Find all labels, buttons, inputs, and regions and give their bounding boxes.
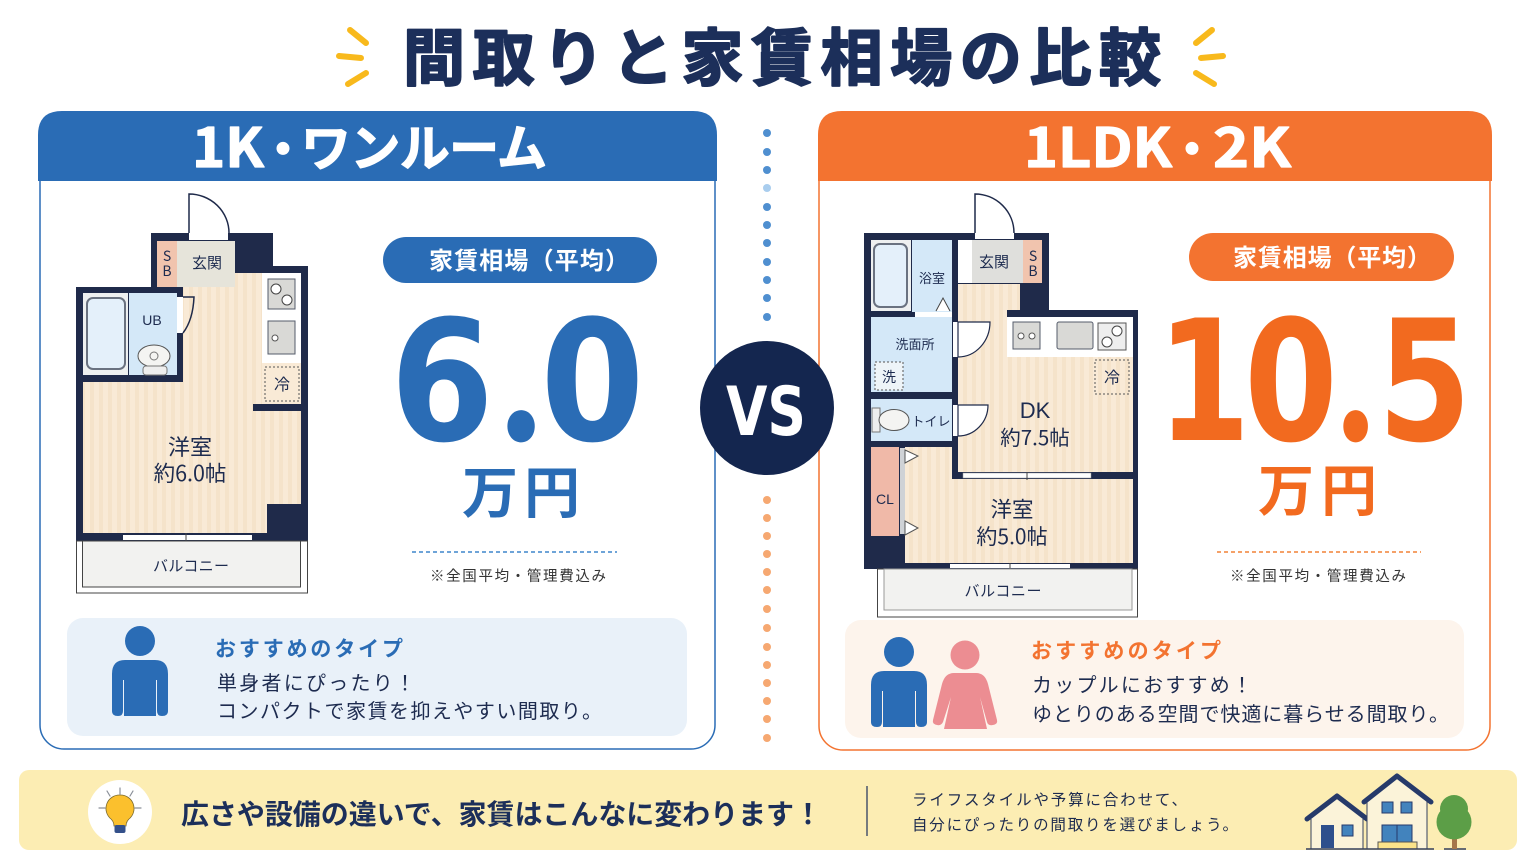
divider dots: blue: [763, 129, 771, 321]
floor: [83, 273, 301, 533]
closet: [871, 447, 918, 536]
floor plan: 1K: [76, 194, 308, 593]
entrance: 玄関: [979, 251, 1009, 272]
washroom: [871, 317, 952, 392]
rent label pill: 家賃相場（平均）: [429, 241, 629, 276]
price: 6.0: 0: [540, 284, 644, 480]
washroom: 洗面所: [895, 334, 935, 353]
icon: houses and tree: [1306, 776, 1472, 849]
icon: right sparkle: [1196, 30, 1223, 84]
bottom banner: [19, 770, 1517, 850]
room label: [154, 430, 226, 488]
panel header: 1LDK: 2K: [1213, 104, 1292, 183]
icon: light bulb: [88, 780, 152, 844]
room labels: DK: [1020, 398, 1051, 423]
recommendation text: カップルにおすすめ！: [1032, 669, 1252, 698]
kitchen: [1007, 310, 1138, 357]
DK floor: [958, 284, 1133, 472]
toilet: トイレ: [911, 411, 951, 430]
price: 10.5: .: [1334, 246, 1377, 489]
door swing: [975, 194, 1014, 233]
kitchen: [262, 273, 301, 363]
banner side text: [912, 788, 1238, 835]
panel header: 1LDK: ・: [1169, 114, 1215, 180]
panel header: 1LDK: [818, 104, 1492, 183]
room labels: 洋室: [990, 493, 1034, 524]
room labels: [976, 398, 1070, 551]
recommendation box: [845, 620, 1464, 738]
panel header: 1K: ・: [260, 114, 306, 180]
rent label pill: 家賃相場（平均）: [1233, 238, 1431, 273]
balcony: バルコニー: [964, 580, 1042, 601]
fridge: [262, 363, 301, 404]
recommendation text: コンパクトで家賃を抑えやすい間取り。: [217, 695, 602, 724]
recommendation text: おすすめのタイプ: [215, 633, 403, 663]
unit bath: UB: [142, 312, 162, 328]
balcony: [76, 533, 308, 593]
recommendation text: ゆとりのある空間で快適に暮らせる間取り。: [1032, 698, 1449, 727]
unit: 万円: [462, 449, 580, 530]
icon: couple: [871, 637, 997, 729]
rent label pill: [1189, 233, 1454, 281]
bedroom floor: [905, 447, 1133, 563]
price: 10.5: 5: [1378, 284, 1471, 480]
door swing: [189, 194, 229, 233]
washroom: 洗: [882, 367, 896, 387]
bathroom: [871, 240, 952, 317]
balcony: [878, 569, 1138, 617]
balcony: バルコニー: [153, 555, 229, 576]
panel header: 1LDK: 1LDK: [1024, 104, 1173, 183]
entrance: [958, 240, 1042, 283]
divider dots: orange: [763, 496, 771, 742]
price: 10.5: 0: [1244, 284, 1338, 480]
fridge: 冷: [1104, 364, 1120, 388]
title: 間取りと家賃相場の比較: [403, 8, 1161, 98]
VS badge: VS: [726, 373, 806, 452]
price: 10.5: 1: [1157, 284, 1251, 480]
closet: CL: [876, 491, 894, 507]
bathroom: 浴室: [919, 268, 945, 287]
panel: 1LDK 2K: [818, 104, 1492, 750]
recommendation text: [1031, 635, 1449, 727]
room label: 洋室: [168, 430, 212, 462]
entrance: 玄関: [192, 252, 222, 273]
interior doors: [953, 322, 990, 436]
entrance: B: [1028, 261, 1038, 281]
entrance: [157, 241, 235, 287]
floor plan: 1LDK: [864, 194, 1138, 617]
room label: 約6.0帖: [154, 457, 226, 488]
room labels: 約7.5帖: [1000, 421, 1070, 451]
recommendation box: [67, 618, 687, 736]
price: 6.0: .: [497, 246, 545, 489]
note: ※全国平均・管理費込み: [1230, 565, 1406, 586]
toilet: [871, 399, 952, 441]
panel header: 1K: 1K: [192, 104, 265, 183]
entrance: S: [1029, 246, 1037, 266]
recommendation text: おすすめのタイプ: [1031, 635, 1221, 665]
fridge: [1095, 360, 1129, 394]
banner side text: 自分にぴったりの間取りを選びましょう。: [912, 813, 1238, 835]
room labels: 約5.0帖: [976, 521, 1048, 551]
icon: single person: [112, 626, 168, 716]
rent label pill: [383, 237, 657, 283]
unit: 万円: [1258, 447, 1377, 528]
banner message: 広さや設備の違いで、家賃はこんなに変わります！: [181, 793, 822, 833]
fridge: 冷: [274, 371, 290, 395]
banner side text: ライフスタイルや予算に合わせて、: [912, 788, 1187, 810]
unit bath: [76, 287, 194, 382]
VS badge: [700, 341, 834, 475]
recommendation text: 単身者にぴったり！: [217, 667, 415, 696]
note: ※全国平均・管理費込み: [430, 565, 606, 586]
icon: left sparkle: [339, 30, 366, 84]
panel: 1K one-room: [38, 104, 717, 749]
price: 6.0: 6: [390, 284, 494, 480]
panel header: 1K: ワンルーム: [301, 109, 547, 181]
entrance: B: [162, 261, 172, 281]
panel header: 1K: [38, 104, 717, 183]
entrance: S: [163, 246, 171, 266]
recommendation text: [215, 633, 602, 724]
